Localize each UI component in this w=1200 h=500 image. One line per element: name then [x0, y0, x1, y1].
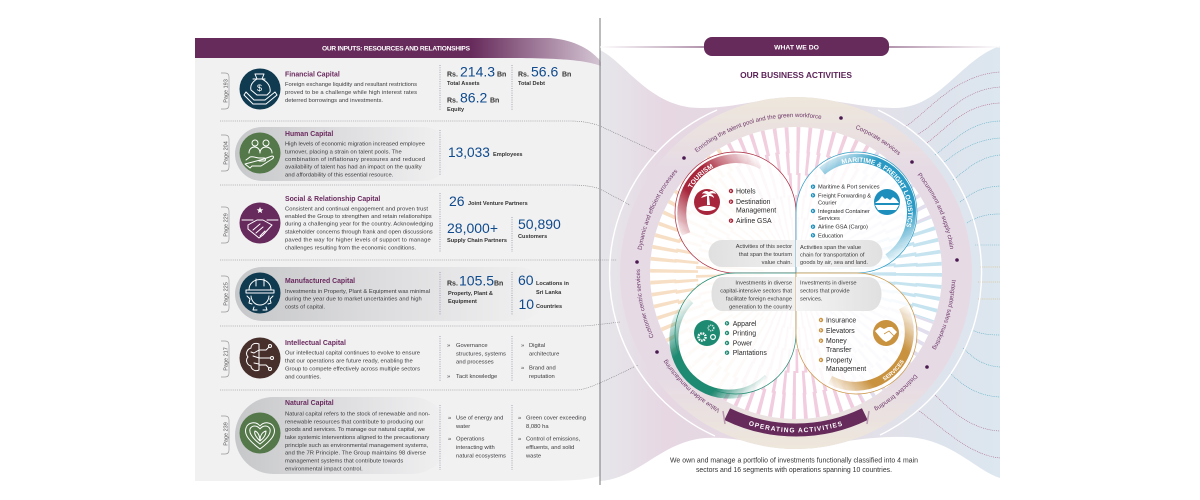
- strategic list: Apparel: [733, 321, 757, 328]
- tourism callout: that span the tourism: [739, 252, 792, 258]
- row: intellectual capital: Governance: [456, 343, 488, 349]
- right side dotted connectors: [905, 72, 1000, 458]
- page tab: [221, 416, 230, 454]
- row: intellectual capital: structures, systems: [456, 352, 506, 358]
- row: financial capital: Rs.: [518, 72, 529, 78]
- services list: Elevators: [826, 328, 855, 335]
- row: social and relationship capital: 26: [449, 193, 465, 209]
- row: intellectual capital: reputation: [529, 374, 555, 380]
- panel: services: [796, 272, 918, 394]
- services list: Property: [826, 358, 853, 364]
- ring labels: [636, 112, 956, 413]
- row: intellectual capital: and processes: [456, 360, 494, 366]
- row: financial capital: [221, 64, 571, 113]
- ring labels: Procurement and supply chain: [918, 172, 954, 249]
- panel: maritime and freight logistics: [796, 152, 918, 273]
- row: natural capital: »: [518, 436, 521, 442]
- strategic list: Printing: [733, 330, 756, 338]
- tourism list: Destination: [736, 199, 771, 206]
- row: natural capital: goods and services. To manage our natural capital, we: [285, 427, 425, 433]
- row: intellectual capital: »: [521, 366, 524, 372]
- row: natural capital: Use of energy and: [456, 416, 503, 422]
- maritime list: Maritime & Port services: [818, 185, 880, 191]
- row: financial capital: Bn: [490, 98, 499, 104]
- bottom summary text: sectors and 16 segments with operations spanning 10 countries.: [696, 467, 892, 474]
- row: financial capital: 214.3: [460, 64, 495, 80]
- tourism callout: [708, 240, 796, 267]
- icon: heart and leaf: [240, 412, 280, 454]
- what we do heading: WHAT WE DO: [774, 44, 819, 52]
- row: social and relationship capital: Consistent and continual engagement and proven trust: [285, 206, 428, 212]
- maritime callout: [796, 240, 882, 267]
- left panel background: [195, 58, 600, 481]
- strategic list: Power: [733, 340, 753, 348]
- row: natural capital: natural ecosystems: [456, 454, 506, 460]
- row: financial capital: deterred borrowings and investments.: [285, 98, 383, 104]
- row: financial capital: Foreign exchange liquidity and resultant restrictions: [285, 82, 417, 88]
- row: natural capital: 8,080 ha: [526, 424, 549, 430]
- row: natural capital: [221, 400, 586, 473]
- row: financial capital: Total Debt: [518, 81, 545, 87]
- row: manufactured capital: Bn: [494, 280, 503, 288]
- row: manufactured capital: costs of capital.: [285, 305, 325, 311]
- row dividers: [220, 121, 658, 390]
- tourism list: Hotels: [736, 188, 756, 196]
- row: natural capital: take systemic interventions aligned to the precautionary: [285, 435, 429, 441]
- row: human capital: availability of talent has had an impact on the quality: [285, 165, 422, 171]
- panel: tourism: [674, 152, 796, 273]
- maritime list: Education: [818, 233, 843, 239]
- row: social and relationship capital: paved the way for higher levels of support to manage: [285, 237, 431, 243]
- operating activities ribbon: [722, 408, 870, 436]
- right page hourglass background: [600, 46, 1000, 481]
- page tab: Page 217: [224, 347, 230, 371]
- row: intellectual capital: that our operations are future ready, enabling the: [285, 359, 413, 365]
- row: intellectual capital: and countries.: [285, 374, 321, 380]
- services list: [819, 318, 866, 373]
- row: financial capital: Rs.: [447, 98, 458, 104]
- tourism list: [729, 188, 776, 225]
- ring labels: Corporate services: [856, 125, 900, 155]
- row: social and relationship capital: 50,890: [518, 216, 561, 232]
- page tab: Page 193: [224, 79, 230, 103]
- services callout: Investments in diverse: [800, 281, 857, 287]
- icon: people in hand: [240, 132, 280, 174]
- row: natural capital: water: [455, 424, 470, 430]
- row: intellectual capital: Group to compete effectively across multiple sectors: [285, 367, 420, 373]
- row: natural capital: »: [448, 436, 451, 442]
- row: social and relationship capital: Social & Relationship Capital: [285, 196, 380, 203]
- tourism list: Management: [736, 208, 776, 214]
- row: natural capital: and the 7R Principle. The Group maintains 98 diverse: [285, 451, 426, 457]
- services callout: services.: [800, 297, 823, 303]
- page tab: [221, 341, 230, 377]
- row: natural capital: Operations: [456, 436, 484, 442]
- services list: Transfer: [826, 347, 852, 354]
- row: social and relationship capital: stakeholder concerns through frank and open discussions: [285, 230, 433, 236]
- row: financial capital: Financial Capital: [285, 72, 340, 78]
- row: manufactured capital: Countries: [536, 304, 562, 310]
- page tab: [221, 135, 230, 171]
- strategic callout: capital-intensive sectors that: [720, 289, 792, 295]
- row: financial capital: Bn: [562, 72, 571, 78]
- row: manufactured capital: Property, Plant &: [448, 291, 493, 297]
- row: manufactured capital: Locations in: [536, 281, 570, 287]
- ring labels: Customer centric services: [636, 269, 654, 338]
- services list: Money: [826, 338, 847, 345]
- row: social and relationship capital: enabled the Group to strengthen and retain relationships: [285, 214, 432, 220]
- row: financial capital: proved to be a challenge while high interest rates: [285, 90, 417, 96]
- maritime list: Airline GSA (Cargo): [818, 225, 868, 231]
- business activities wheel: [608, 97, 982, 449]
- row: natural capital: Natural capital refers to the stock of renewable and non-: [285, 411, 430, 417]
- page tab: Page 204: [224, 141, 230, 165]
- row: financial capital: 86.2: [460, 90, 487, 106]
- header bar: our inputs: OUR INPUTS: RESOURCES AND RELATIONSHIPS: [322, 46, 471, 52]
- row: manufactured capital: 60: [518, 272, 534, 288]
- maritime callout: Activities span the value: [800, 245, 861, 251]
- row: intellectual capital: »: [521, 343, 524, 349]
- row: social and relationship capital: Joint Venture Partners: [468, 201, 528, 207]
- strategic list: [725, 321, 767, 357]
- tourism callout: value chain.: [762, 260, 792, 266]
- strategic list: Plantations: [733, 350, 767, 357]
- icon: handshake: [873, 320, 899, 346]
- row: natural capital: management systems that contribute towards: [285, 459, 403, 465]
- row pill highlights: [235, 127, 545, 474]
- maritime callout: goods by air, sea and land.: [800, 260, 868, 266]
- row: intellectual capital: Our intellectual capital continues to evolve to ensure: [285, 351, 420, 357]
- tourism list: Airline GSA: [736, 218, 772, 225]
- page tab: [221, 276, 230, 312]
- row: human capital: and affordability of this essential resource.: [285, 173, 394, 179]
- page tab: Page 229: [224, 213, 230, 237]
- row: intellectual capital: »: [447, 374, 450, 380]
- row: financial capital: Total Assets: [447, 81, 480, 87]
- row: manufactured capital: Equipment: [448, 299, 477, 305]
- row: intellectual capital: Digital: [529, 343, 545, 349]
- row: natural capital: Green cover exceeding: [526, 416, 586, 422]
- row: financial capital: Rs.: [447, 72, 458, 78]
- row: manufactured capital: Rs.: [447, 280, 458, 288]
- ring separator dots: [635, 116, 959, 369]
- services callout: sectors that provide: [800, 289, 850, 295]
- outer ring band: [610, 110, 982, 436]
- page tab: [221, 207, 230, 243]
- maritime list: Services: [818, 216, 840, 222]
- row: social and relationship capital: Supply Chain Partners: [447, 238, 507, 244]
- strategic callout: facilitate foreign exchange: [726, 297, 792, 303]
- page tab: [221, 73, 230, 109]
- services list: Management: [826, 366, 866, 373]
- row: intellectual capital: »: [447, 343, 450, 349]
- maritime list: Courier: [818, 201, 837, 207]
- panel: maritime and freight logistics: MARITIME & FREIGHT LOGISTICS: [842, 157, 913, 228]
- row: manufactured capital: 105.5: [459, 272, 494, 288]
- page tab: Page 225: [224, 282, 230, 306]
- row: human capital: turnover, placing a strain on talent pools. The: [285, 149, 402, 155]
- strategic callout: generation to the country: [729, 305, 792, 311]
- title: our business activities: OUR BUSINESS ACTIVITIES: [740, 70, 852, 80]
- row: financial capital: Equity: [447, 107, 465, 113]
- row: human capital: Human Capital: [285, 131, 333, 138]
- bottom summary text: We own and manage a portfolio of investments functionally classified into 4 main: [670, 458, 918, 465]
- row: natural capital: »: [448, 416, 451, 422]
- row: natural capital: principle such as environmental management systems,: [285, 443, 429, 449]
- row: manufactured capital: 10: [518, 296, 534, 312]
- row: natural capital: Control of emissions,: [526, 436, 581, 442]
- row: natural capital: effluents, and solid: [526, 445, 574, 451]
- row: natural capital: »: [518, 416, 521, 422]
- row: manufactured capital: during the year due to market uncertainties and high: [285, 297, 422, 303]
- icon: hard hat and gear: [240, 272, 280, 314]
- row: intellectual capital: Brand and: [529, 366, 556, 372]
- centre page divider: [599, 18, 601, 485]
- row: financial capital: 56.6: [531, 64, 558, 80]
- row: social and relationship capital: [221, 193, 561, 252]
- row: social and relationship capital: 28,000+: [447, 220, 498, 236]
- row: manufactured capital: [221, 272, 570, 315]
- panel: strategic investments: [669, 272, 796, 399]
- row: manufactured capital: Sri Lanka: [536, 290, 562, 296]
- page tab: Page 239: [224, 422, 230, 446]
- icon: cargo ship: [874, 189, 900, 215]
- row: social and relationship capital: Customers: [518, 234, 547, 240]
- what we do heading: [600, 37, 1000, 56]
- header bar: our inputs: [195, 38, 601, 66]
- services callout: [796, 277, 882, 311]
- panel: services: SERVICES: [882, 360, 904, 380]
- row: social and relationship capital: during a challenging year for the country. Acknowledging: [285, 222, 433, 228]
- operating activities ribbon: OPERATING ACTIVITIES: [749, 421, 842, 432]
- icon: digital brain: [240, 338, 280, 378]
- row: natural capital: interacting with: [456, 445, 495, 451]
- icon: money bag in hand: [240, 68, 280, 110]
- row: intellectual capital: Tacit knowledge: [456, 374, 497, 380]
- ring labels: Dynamic and efficient processes: [638, 170, 678, 250]
- row: intellectual capital: [221, 336, 559, 382]
- row: social and relationship capital: challenges resulting from the economic conditions.: [285, 245, 416, 251]
- tourism callout: Activities of this sector: [736, 244, 792, 250]
- row: intellectual capital: architecture: [529, 352, 559, 358]
- row: natural capital: Natural Capital: [285, 400, 334, 407]
- panel: tourism: TOURISM: [688, 164, 714, 188]
- icon: handshake: [240, 202, 280, 244]
- icon: palm island: [694, 189, 720, 215]
- maritime list: Integrated Container: [818, 209, 870, 215]
- row: human capital: 13,033: [448, 145, 490, 160]
- row: manufactured capital: Investments in Property, Plant & Equipment was minimal: [285, 289, 430, 295]
- ring labels: Distinctive branding: [874, 374, 918, 411]
- maritime callout: chain for transportation of: [800, 252, 865, 258]
- maritime list: Freight Forwarding &: [818, 193, 871, 199]
- row: natural capital: waste: [525, 454, 541, 460]
- row: manufactured capital: Manufactured Capital: [285, 278, 355, 285]
- ring labels: Integrated sales marketing: [932, 280, 956, 350]
- row: human capital: combination of inflationary pressures and reduced: [285, 157, 425, 163]
- ring labels: Enriching the talent pool and the green workforce: [694, 112, 822, 152]
- maritime list: [811, 184, 880, 239]
- row: human capital: Employees: [493, 152, 523, 158]
- row: natural capital: environmental impact control.: [285, 467, 363, 473]
- row: financial capital: Bn: [497, 72, 506, 78]
- panel: strategic investments: STRATEGIC INVESTMENTS: [678, 334, 736, 391]
- strategic callout: [712, 277, 796, 311]
- row: human capital: [221, 130, 523, 179]
- row: intellectual capital: Intellectual Capital: [285, 340, 346, 347]
- radial burst pattern: [663, 140, 929, 406]
- strategic callout: Investments in diverse: [735, 281, 792, 287]
- row: natural capital: renewable resources that contribute to producing our: [285, 419, 423, 425]
- row: human capital: High levels of economic migration increased employee: [285, 141, 425, 147]
- icon: gears: [694, 320, 720, 346]
- ring labels: Value added manufacturing: [664, 360, 719, 413]
- services list: Insurance: [826, 318, 856, 324]
- icon: money bag in hand: $: [257, 83, 262, 93]
